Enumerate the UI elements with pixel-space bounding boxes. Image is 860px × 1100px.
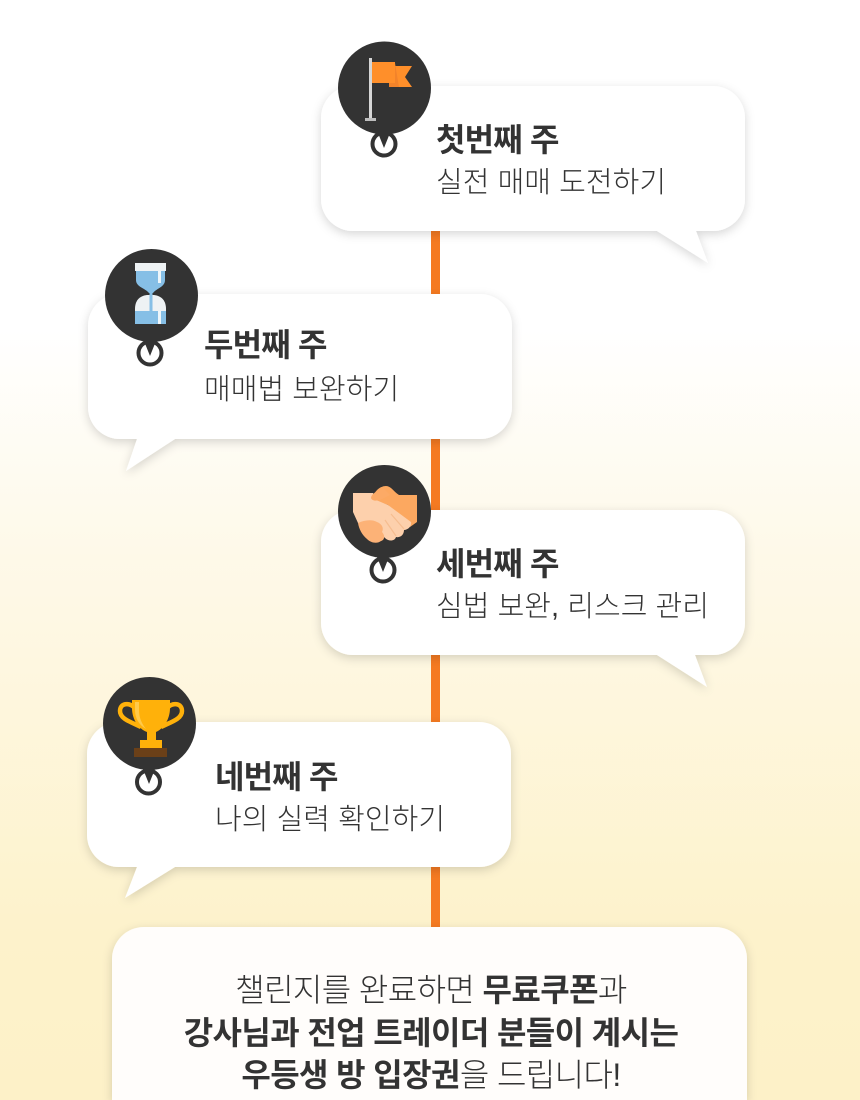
week 4 heading: 네번째 주: [215, 759, 338, 795]
reward text line 2: 강사님과 전업 트레이더 분들이 계시는: [184, 1015, 678, 1051]
panel: week 1: [321, 42, 745, 263]
panel: week 4: [87, 677, 511, 898]
speech bubble: [87, 722, 511, 898]
pin ring: [138, 342, 162, 364]
reward text line 3: 우등생 방 입장권을 드립니다!: [241, 1057, 621, 1093]
pin ring: [372, 132, 396, 156]
speech bubble: [321, 86, 745, 263]
reward text line 1: 챌린지를 완료하면 무료쿠폰과: [235, 972, 627, 1008]
pin ring: [137, 770, 160, 794]
week 2 heading: 두번째 주: [204, 327, 327, 363]
pin ring: [372, 558, 394, 582]
week 3 heading: 세번째 주: [436, 546, 559, 582]
icon: flag: [338, 42, 431, 148]
week 3 description: 심법 보완, 리스크 관리: [436, 591, 709, 623]
week 1 heading: 첫번째 주: [436, 122, 559, 158]
panel: week 2: [88, 249, 512, 471]
icon: handshake: [338, 465, 431, 572]
icon: trophy: [103, 677, 196, 784]
timeline vertical line: [431, 225, 440, 935]
panel: week 3: [321, 465, 745, 687]
week 4 description: 나의 실력 확인하기: [215, 804, 445, 836]
panel: reward message: [112, 927, 747, 1100]
icon: hourglass: [105, 249, 198, 356]
week 1 description: 실전 매매 도전하기: [436, 167, 666, 199]
speech bubble: [321, 510, 745, 687]
week 2 description: 매매법 보완하기: [204, 374, 399, 406]
speech bubble: [88, 294, 512, 471]
reward card: [112, 927, 747, 1100]
